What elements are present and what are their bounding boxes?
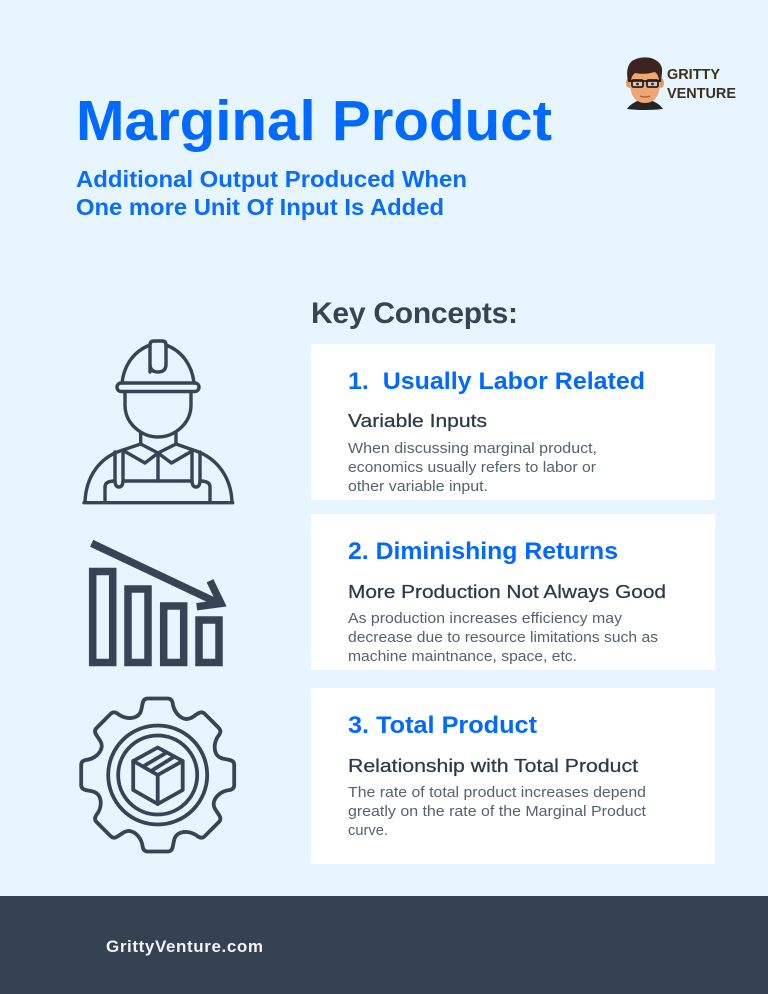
card 1 body: When discussing marginal product, <box>348 440 597 457</box>
card 2 subheading: More Production Not Always Good <box>348 582 666 602</box>
footer <box>0 896 768 994</box>
card 2 body: As production increases efficiency may <box>348 610 623 627</box>
icon: gear with box <box>75 692 240 858</box>
card 1 body: other variable input. <box>348 478 488 495</box>
heading: key concepts: Key Concepts: <box>311 297 518 330</box>
logo: Gritty Venture <box>626 57 736 110</box>
icon: construction worker <box>84 341 233 503</box>
card 3 subheading: Relationship with Total Product <box>348 756 638 776</box>
card 2 body <box>348 610 658 665</box>
card 1 subheading: Variable Inputs <box>348 411 487 431</box>
card 2 body: decrease due to resource limitations such as <box>348 629 658 646</box>
card 2 body: machine maintnance, space, etc. <box>348 648 577 665</box>
card 2 heading: 2. Diminishing Returns <box>348 538 618 565</box>
footer website text: GrittyVenture.com <box>106 937 263 956</box>
subtitle: One more Unit Of Input Is Added <box>76 194 444 220</box>
icon: declining bars with arrow <box>92 543 221 662</box>
card 1 body: economics usually refers to labor or <box>348 459 596 476</box>
card 1 heading: 1. Usually Labor Related <box>348 368 645 395</box>
title: Marginal Product <box>76 89 552 153</box>
card 3 heading: 3. Total Product <box>348 712 537 739</box>
panel: diminishing returns <box>311 514 715 670</box>
panel: usually labor related <box>311 344 715 500</box>
panel: total product <box>311 688 715 864</box>
icon: avatar <box>626 57 664 110</box>
logo: Gritty Venture: GRITTY <box>667 67 720 83</box>
logo: Gritty Venture: VENTURE <box>667 86 736 102</box>
subtitle: Additional Output Produced When <box>76 166 467 192</box>
card 3 body: curve. <box>348 822 388 839</box>
card 3 body <box>348 784 647 839</box>
subtitle <box>76 166 467 220</box>
card 1 body <box>348 440 597 495</box>
card 3 body: greatly on the rate of the Marginal Product <box>348 803 647 820</box>
card 3 body: The rate of total product increases depend <box>348 784 646 801</box>
